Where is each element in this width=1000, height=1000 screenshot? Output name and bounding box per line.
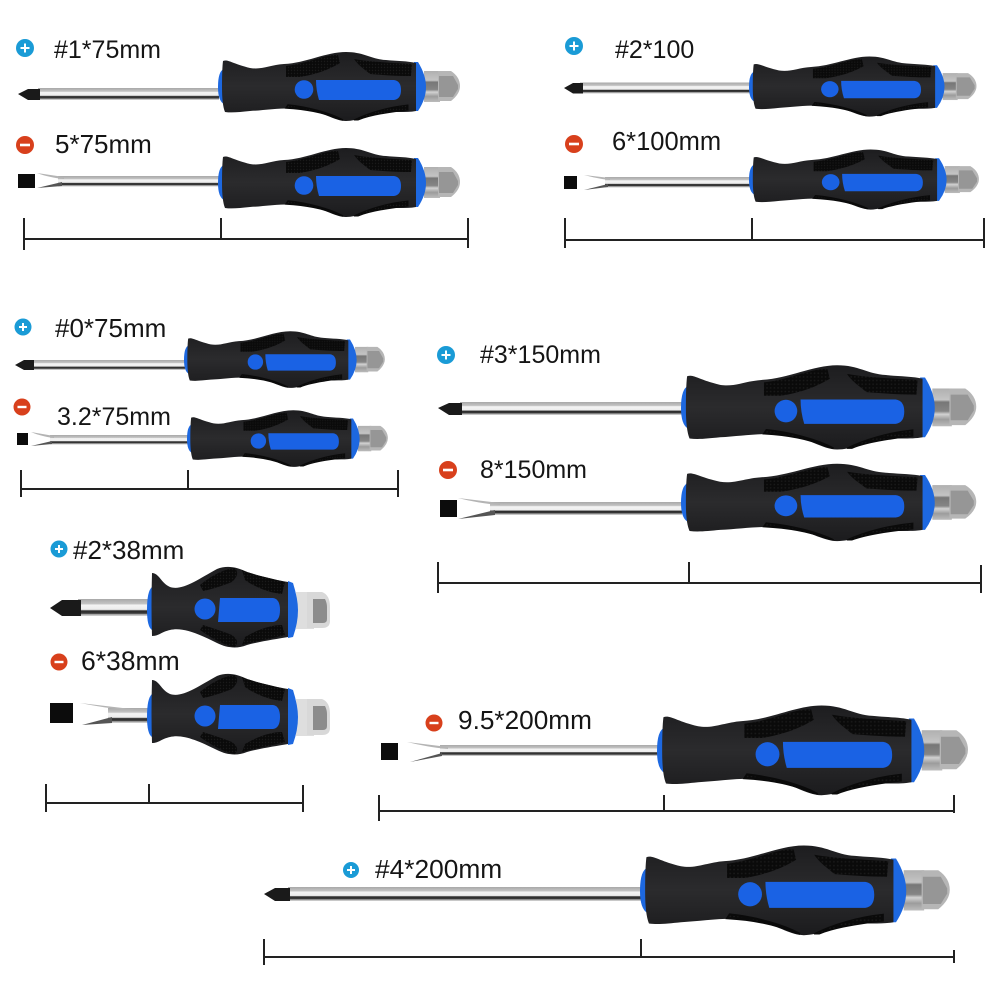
label: 6*100mm: 6*100mm [612,128,721,156]
phillips icon: #3 [437,346,455,364]
screwdriver group: #4*200 [264,846,954,965]
screwdriver: 5*75mm [18,148,460,217]
screwdriver: #1*75mm [18,52,460,121]
screwdriver group: middle left [14,313,398,497]
label: 3.2*75mm: 3.2*75mm [57,403,171,431]
screwdriver: 3.2*75mm [17,410,388,467]
screwdriver: 6*100mm [564,150,979,210]
screwdriver: #0*75mm [15,331,385,388]
slotted icon: 8*150 [439,461,457,479]
screwdriver group: 9.5*200 [379,705,968,821]
label: #4*200mm: #4*200mm [375,854,502,884]
label: #2*100: #2*100 [615,36,694,64]
screwdriver: 6*38mm [50,674,330,754]
phillips icon: #0 [14,318,32,336]
phillips icon: #2 stubby [50,540,68,558]
scale bar: top right [565,218,984,248]
phillips icon: #1 [16,39,34,57]
label: 8*150mm: 8*150mm [480,456,587,484]
screwdriver: 9.5*200mm [381,706,968,795]
scale bar: #4*200 [264,939,954,965]
screwdriver: #2*38mm [50,567,330,647]
label: #2*38mm: #2*38mm [73,535,184,565]
screwdriver: #2*100 [564,57,976,117]
label: 9.5*200mm: 9.5*200mm [458,705,592,735]
slotted icon: 9.5*200 [426,714,442,732]
scale bar: middle left [21,470,398,497]
screwdriver: 8*150mm [440,464,976,541]
screwdriver group: middle right [437,341,981,593]
screwdriver: #4*200mm [264,846,950,935]
slotted icon: 3.2*75 [14,398,30,416]
phillips icon: #2 [565,37,583,55]
scale bar: middle right [438,562,981,593]
label: #3*150mm: #3*150mm [480,341,601,369]
label: 5*75mm: 5*75mm [55,129,152,159]
scale bar: stubby [46,784,303,812]
phillips icon: #4 [343,862,359,878]
scale bar: 9.5*200 [379,795,954,821]
screwdriver group: top right [564,36,984,248]
screwdriver: #3*150mm [438,365,976,449]
label: #1*75mm: #1*75mm [54,36,161,64]
scale bar: top left [24,218,468,250]
slotted icon: 6*100 [565,135,583,153]
label: 6*38mm: 6*38mm [81,646,180,676]
slotted icon: 6*38 [50,654,68,670]
slotted icon: 5*75 [16,136,34,154]
screwdriver group: stubby [46,535,330,812]
label: #0*75mm: #0*75mm [55,313,166,343]
screwdriver group: top left [16,36,468,250]
